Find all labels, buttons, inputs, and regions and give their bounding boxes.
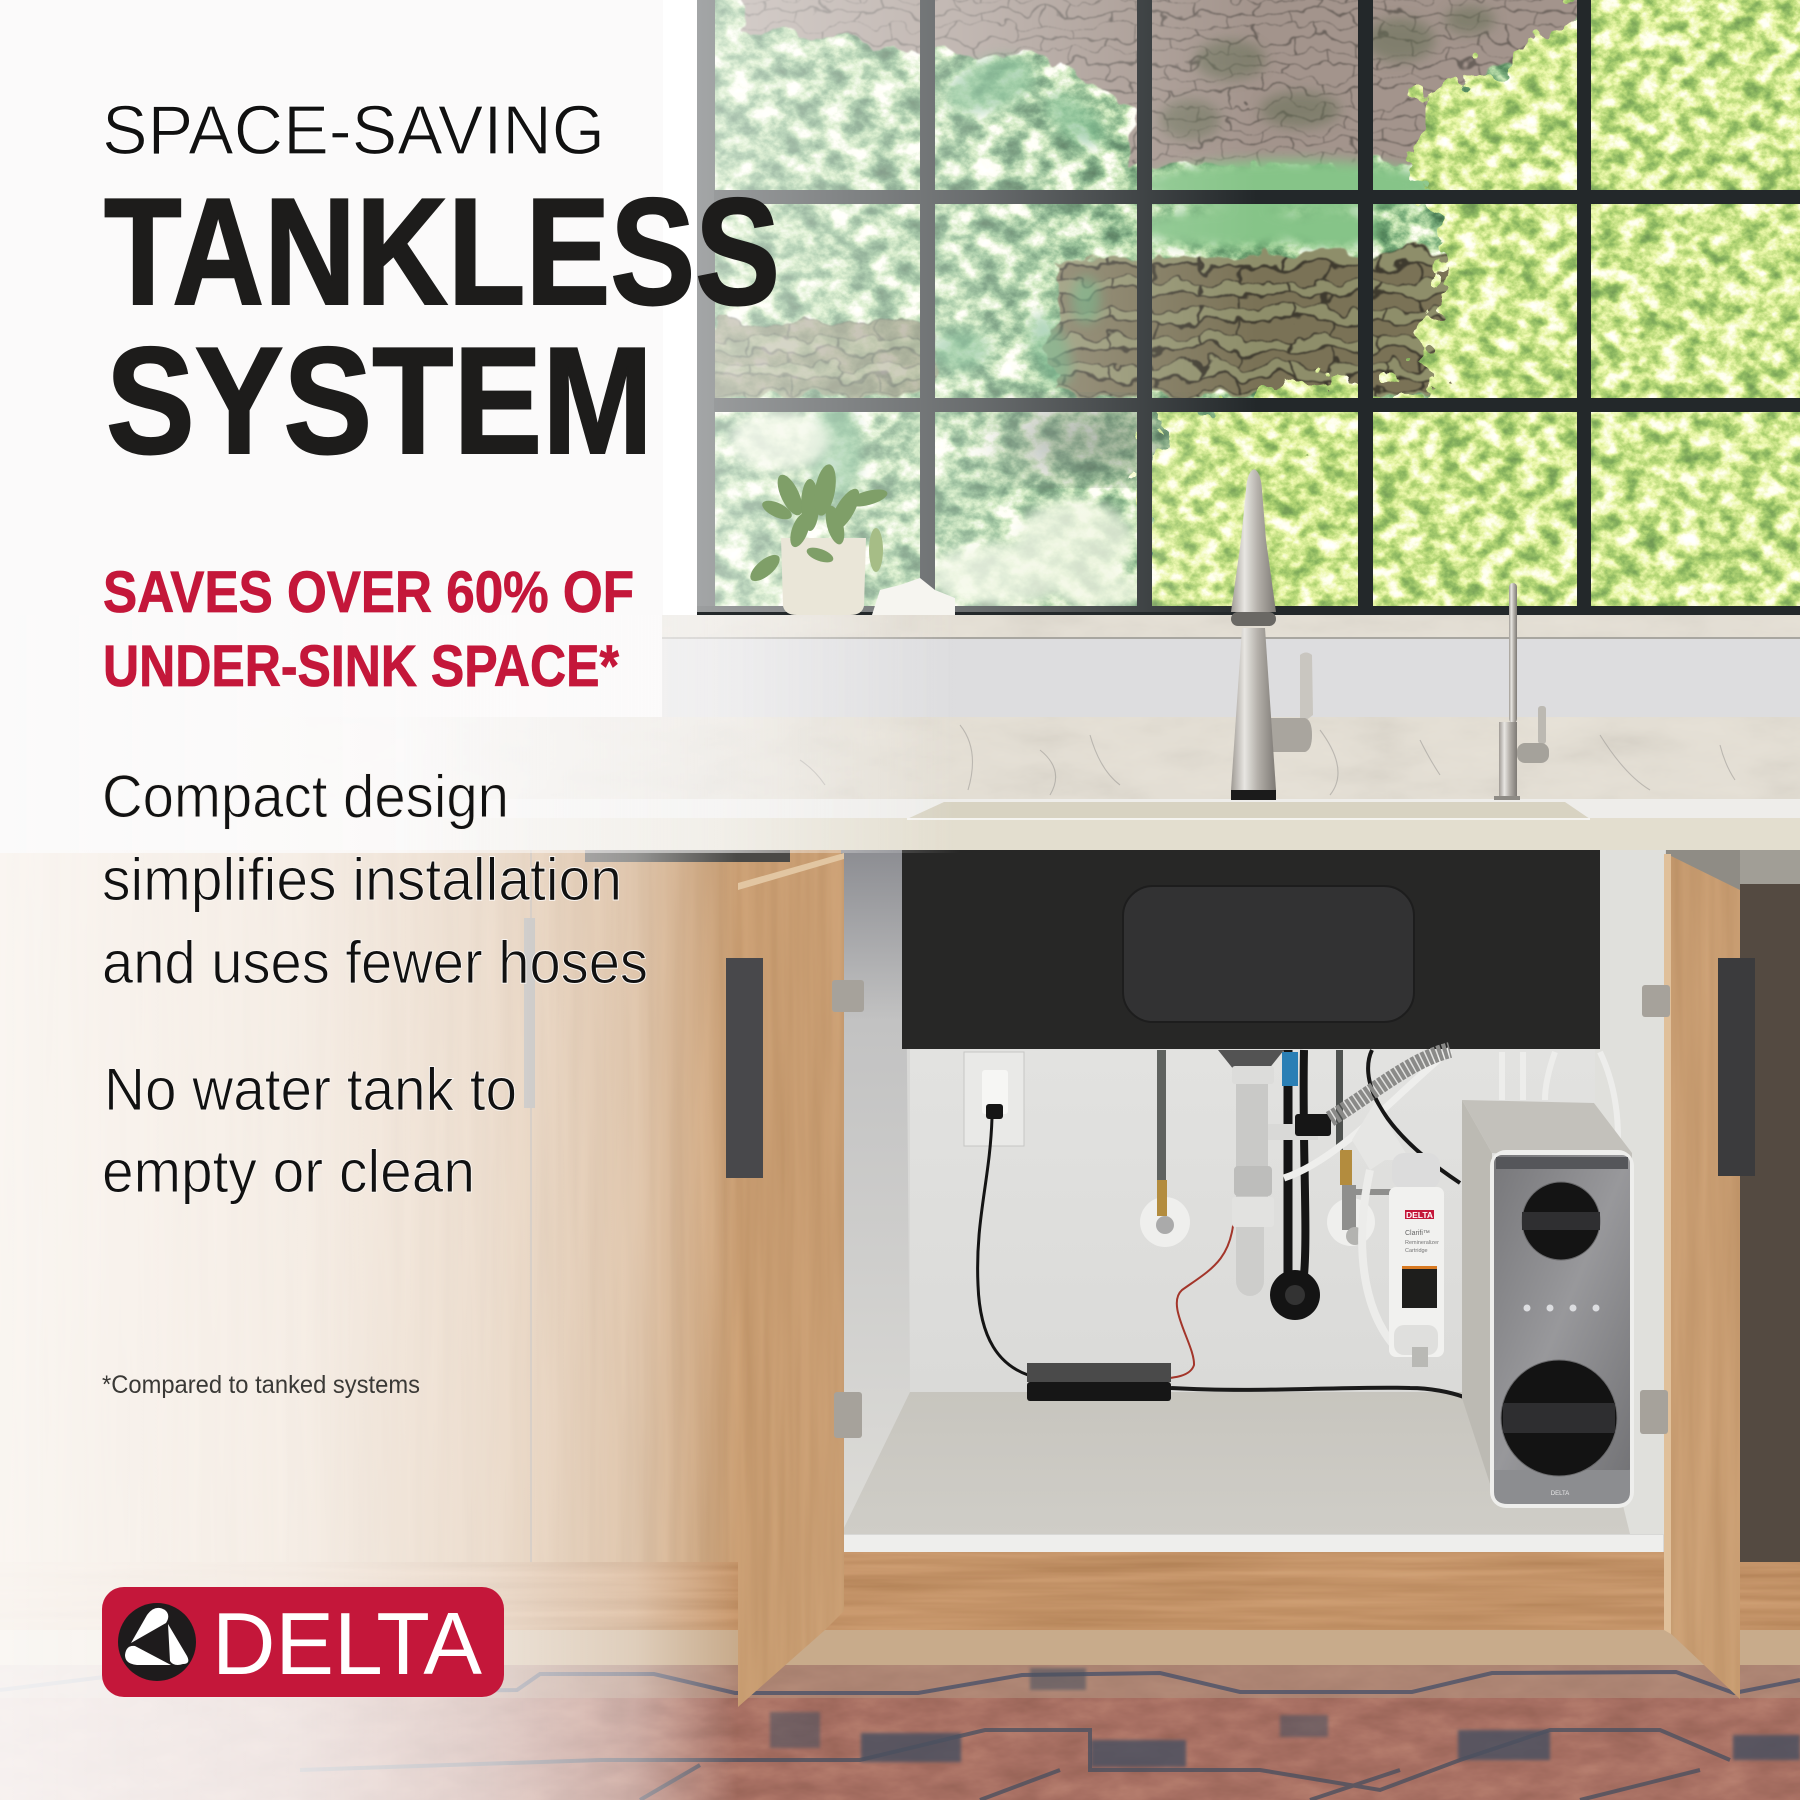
rug motifs — [770, 1668, 1800, 1767]
window white fade at left — [697, 0, 1257, 612]
shadowed area lower middle — [1000, 410, 1180, 470]
lower knob — [1501, 1360, 1617, 1476]
cabinet interior — [841, 850, 1666, 1552]
body text: compact design: and uses fewer hoses — [102, 929, 648, 996]
body text: no water tank — [102, 1056, 517, 1205]
brick wall behind garden — [740, 0, 1585, 165]
water filter cartridge: Cartridge — [1405, 1248, 1428, 1254]
black grommet — [1270, 1270, 1320, 1320]
left fade overlay over cabinets and rug — [0, 853, 738, 1800]
red subheading: SAVES OVER 60% OF — [103, 560, 634, 625]
window frame mullions — [697, 0, 1800, 616]
rug stepped outlines — [300, 1730, 1730, 1800]
windowsill — [662, 615, 1800, 639]
backsplash — [0, 717, 1800, 800]
left valve — [1140, 1197, 1190, 1247]
touch buttons — [1524, 1304, 1600, 1312]
body text: no water tank: empty or clean — [102, 1138, 475, 1205]
tankless RO system unit: DELTA — [1551, 1491, 1569, 1497]
tubes above the tankless unit — [1502, 1052, 1618, 1138]
red subheading — [103, 560, 634, 699]
title: SPACE-SAVING: SPACE-SAVING — [102, 91, 605, 169]
white strip beside window — [663, 0, 697, 615]
red subheading: UNDER-SINK SPACE* — [103, 634, 619, 699]
hoses and shutoff valves — [1140, 1050, 1460, 1350]
toe kick and floor — [0, 1562, 1800, 1666]
red Delta label — [1405, 1210, 1434, 1219]
conifer tree at right — [1150, 0, 1800, 640]
body text: compact design — [102, 763, 648, 996]
left fade overlay over counter and wall — [0, 615, 960, 853]
potted plant — [746, 463, 955, 615]
ivy on brick wall — [1160, 6, 1495, 140]
title: SYSTEM: SYSTEM — [106, 316, 653, 486]
silver base — [1494, 1470, 1630, 1504]
undermount sink — [902, 850, 1600, 1049]
black door pull — [726, 958, 763, 1178]
big bush leaves — [809, 45, 1113, 500]
title: TANKLESS: TANKLESS — [104, 167, 780, 337]
wall below sill — [662, 639, 1800, 717]
white shelf lip — [841, 1535, 1663, 1552]
water filter cartridge: DELTA — [1406, 1210, 1433, 1220]
cabinet floor — [841, 1392, 1630, 1534]
body text: compact design: Compact design — [102, 763, 509, 830]
bottom rail — [825, 1552, 1670, 1630]
tankless RO system unit — [1462, 1100, 1634, 1508]
back wall — [910, 1049, 1600, 1394]
right valve — [1327, 1198, 1375, 1246]
black door pull — [1718, 958, 1755, 1176]
filtered water faucet — [1494, 583, 1549, 800]
Delta logo — [102, 1587, 504, 1697]
left cabinet front — [0, 850, 845, 1564]
left cabinet door — [726, 850, 844, 1710]
green leaves below brick — [1140, 160, 1440, 250]
Delta logo: DELTA — [212, 1594, 482, 1693]
stacked stone wall — [1055, 250, 1490, 396]
footnote: *Compared to tanked systems — [102, 1371, 420, 1399]
dishwasher panel at right — [1666, 850, 1800, 1562]
corrugated grey hose — [1330, 1050, 1450, 1119]
water filter cartridge: Remineralizer — [1405, 1240, 1439, 1246]
rug border band — [0, 1665, 1800, 1698]
inverter box — [1027, 1363, 1171, 1401]
white tubes — [1284, 1050, 1450, 1178]
door hinges — [832, 980, 1670, 1438]
window with garden view — [697, 0, 1800, 640]
water filter cartridge: Clarifi™ — [1405, 1230, 1430, 1237]
pale stone at left — [714, 322, 935, 396]
body text: compact design: simplifies installation — [102, 846, 622, 913]
upper knob — [1522, 1182, 1600, 1260]
black label panel — [1402, 1266, 1437, 1308]
rug — [0, 1665, 1800, 1800]
drain pipe and p-trap — [1218, 1050, 1331, 1296]
power cord and red wire — [978, 1118, 1464, 1397]
electrical outlet with plug — [964, 1052, 1024, 1146]
body text: no water tank: No water tank to — [104, 1056, 517, 1123]
water filter cartridge — [1389, 1153, 1444, 1367]
left side wall — [841, 850, 910, 1534]
main kitchen faucet — [1231, 469, 1313, 800]
countertop — [0, 799, 1800, 850]
rug border zigzag — [0, 1672, 1800, 1693]
pale sunlit leaves — [730, 410, 1145, 610]
right side wall — [1595, 850, 1665, 1534]
right cabinet door — [1664, 850, 1755, 1700]
